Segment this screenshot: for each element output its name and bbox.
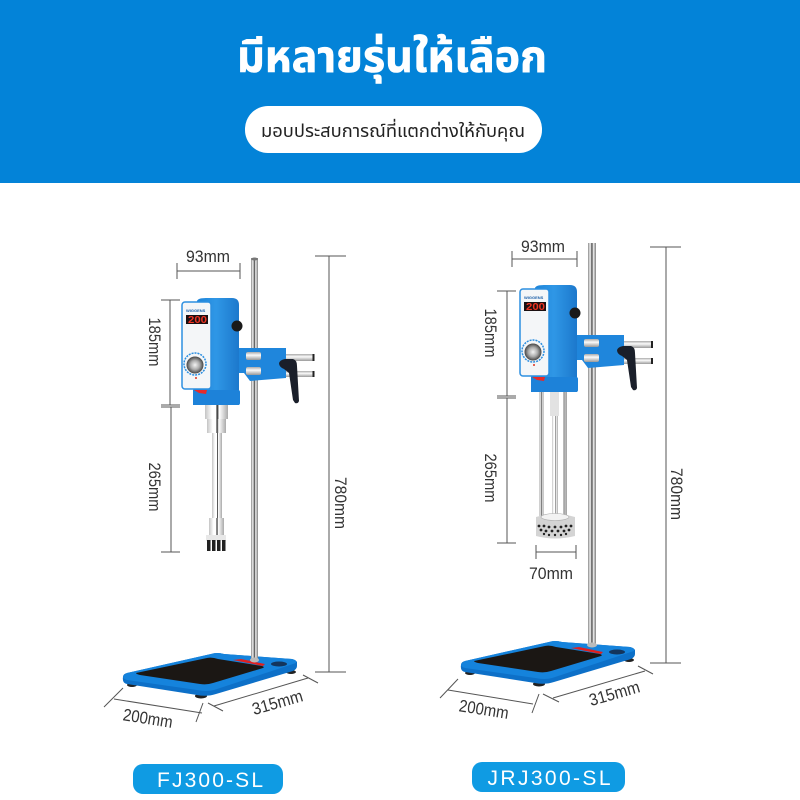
base length 315mm: 315mm bbox=[587, 677, 642, 710]
clamp handle bbox=[617, 346, 637, 390]
clamp bbox=[577, 335, 653, 368]
speed knob bbox=[184, 353, 206, 375]
dissolver shafts and basket bbox=[536, 392, 575, 538]
base depth 200mm: 200mm bbox=[122, 705, 174, 732]
height 780mm: 780mm bbox=[331, 477, 350, 529]
red switch bbox=[532, 377, 545, 381]
width 93mm: 93mm bbox=[521, 237, 565, 256]
support rod bbox=[587, 243, 597, 648]
height 780mm bbox=[315, 256, 350, 672]
width 93mm bbox=[512, 237, 577, 267]
height 185mm: 185mm bbox=[481, 308, 500, 358]
mixer head bbox=[182, 298, 314, 405]
base plate bbox=[461, 641, 635, 686]
side button bbox=[232, 320, 242, 332]
base length 315mm: 315mm bbox=[250, 686, 305, 719]
model label: FJ300-SL bbox=[133, 764, 283, 794]
height 265mm bbox=[481, 398, 516, 543]
height 185mm bbox=[145, 300, 180, 405]
speed knob bbox=[522, 340, 544, 362]
width 93mm: 93mm bbox=[186, 247, 230, 266]
control panel: WIGGENS bbox=[524, 295, 544, 300]
base length 315mm bbox=[543, 666, 653, 710]
control panel bbox=[182, 302, 211, 389]
subtitle pill bbox=[245, 106, 542, 153]
control panel: WIGGENS bbox=[186, 308, 206, 313]
height 265mm bbox=[145, 407, 180, 552]
control panel bbox=[520, 289, 549, 376]
LED display: 200 bbox=[526, 302, 545, 313]
height 780mm: 780mm bbox=[667, 468, 686, 520]
dimensions: FJ300-SL bbox=[104, 247, 350, 732]
basket width 70mm bbox=[529, 545, 576, 583]
subtitle pill: มอบประสบการณ์ที่แตกต่างให้กับคุณ bbox=[261, 118, 525, 142]
support rod bbox=[250, 258, 259, 662]
height 185mm bbox=[481, 291, 516, 396]
side button bbox=[570, 308, 580, 318]
height 185mm: 185mm bbox=[145, 318, 164, 366]
base length 315mm bbox=[208, 675, 318, 719]
basket width 70mm: 70mm bbox=[529, 564, 573, 583]
base depth 200mm: 200mm bbox=[458, 696, 510, 723]
base plate bbox=[123, 653, 297, 698]
product: FJ300-SL bbox=[123, 258, 314, 698]
disperser shaft bbox=[205, 405, 228, 551]
product: JRJ300-SL bbox=[461, 243, 653, 686]
height 265mm: 265mm bbox=[481, 454, 500, 502]
header banner bbox=[0, 0, 800, 183]
width 93mm bbox=[177, 247, 240, 279]
model label: FJ300-SL: FJ300-SL bbox=[157, 769, 263, 792]
height 780mm bbox=[650, 247, 686, 663]
motor body bbox=[193, 298, 239, 405]
LED display: 200 bbox=[188, 315, 207, 326]
model label: JRJ300-SL: JRJ300-SL bbox=[488, 767, 610, 790]
height 265mm: 265mm bbox=[145, 462, 164, 512]
clamp handle bbox=[279, 359, 299, 403]
dimensions: JRJ300-SL bbox=[440, 237, 686, 723]
red switch bbox=[194, 390, 207, 394]
motor body bbox=[531, 285, 577, 392]
model label: JRJ300-SL bbox=[472, 762, 625, 792]
base depth 200mm bbox=[104, 688, 203, 732]
mixer head bbox=[520, 285, 653, 392]
base depth 200mm bbox=[440, 679, 539, 723]
title: มีหลายรุ่นให้เลือก bbox=[237, 33, 547, 84]
clamp bbox=[239, 348, 314, 381]
